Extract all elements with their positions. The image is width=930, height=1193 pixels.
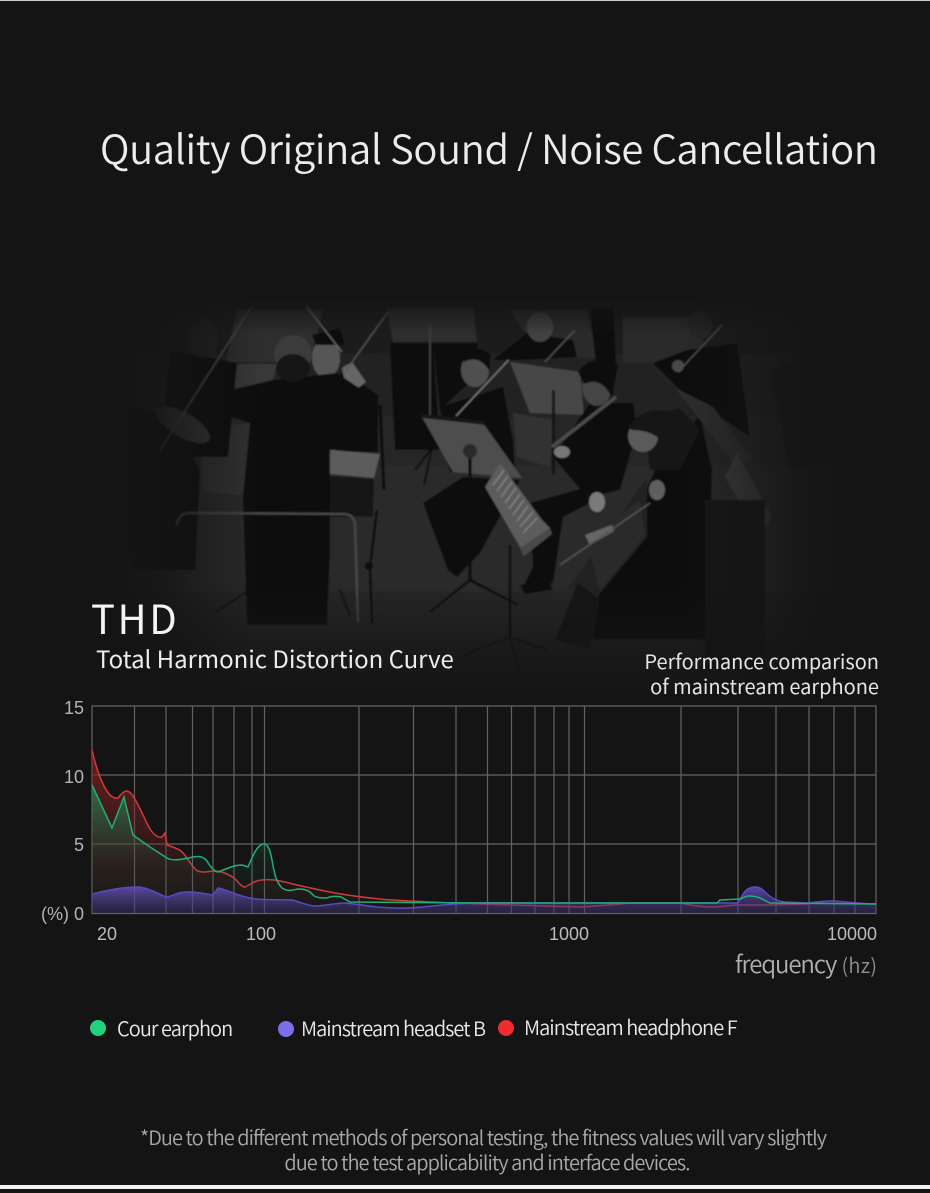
- y axis labels: [41, 698, 84, 924]
- man behind conductor: [312, 372, 378, 452]
- red series: [92, 750, 876, 913]
- second row stand and chair: [510, 362, 584, 415]
- chart grid: [92, 706, 876, 914]
- music sheet: [485, 463, 550, 555]
- footnote: *Due to the different methods of personal testing, the fitness values will vary slightly: [140, 1122, 826, 1151]
- music stand, centre: [422, 417, 522, 478]
- title: Quality Original Sound / Noise Cancellation: [100, 118, 878, 176]
- x axis labels: 100: [246, 924, 276, 944]
- legend: Mainstream headphone F: Mainstream headphone F: [524, 1012, 737, 1041]
- dark right seats: [705, 500, 765, 670]
- y axis labels: 15: [64, 698, 84, 718]
- back centre woman: [493, 333, 577, 360]
- conductor's podium rail: [177, 513, 358, 622]
- blue series: [92, 887, 876, 913]
- legend: Mainstream headset B: Mainstream headset B: [301, 1013, 485, 1042]
- centre woman with glasses: [440, 387, 515, 472]
- vignette fades: [60, 290, 260, 710]
- left violinists: [160, 350, 237, 457]
- green series: [92, 785, 876, 913]
- text: performance comparison note: Performance comparison: [644, 646, 879, 675]
- axis title: frequency (hz): frequency (hz): [735, 945, 877, 980]
- photo: orchestra with conductor: [164, 306, 774, 640]
- chair behind conductor: [200, 423, 252, 495]
- right back violinist and stand: [653, 343, 750, 437]
- legend: [90, 1012, 738, 1042]
- table with score: [330, 450, 380, 478]
- text: performance comparison note: of mainstream earphone: [650, 671, 879, 700]
- subheading: Total Harmonic Distortion Curve: Total Harmonic Distortion Curve: [96, 640, 454, 675]
- footnote: due to the test applicability and interface devices.: [284, 1147, 690, 1176]
- legend: Cour earphon: Cour earphon: [117, 1013, 232, 1042]
- y axis labels: 5: [74, 835, 84, 855]
- x axis labels: 1000: [549, 924, 589, 944]
- text: performance comparison note: [644, 646, 879, 700]
- y axis labels: 10: [64, 767, 84, 787]
- conductor: [200, 335, 377, 625]
- heading: THD: THD: [91, 588, 179, 646]
- x axis labels: 10000: [827, 924, 877, 944]
- footnote: [140, 1122, 827, 1176]
- floor: [80, 300, 870, 700]
- x axis labels: 20: [97, 924, 117, 944]
- back row stands: [226, 310, 323, 362]
- x axis labels: [97, 924, 877, 944]
- right violinist: [553, 403, 637, 497]
- case behind conductor: [223, 364, 277, 392]
- cellist: [590, 415, 712, 640]
- y axis labels: (%) 0: [41, 904, 84, 924]
